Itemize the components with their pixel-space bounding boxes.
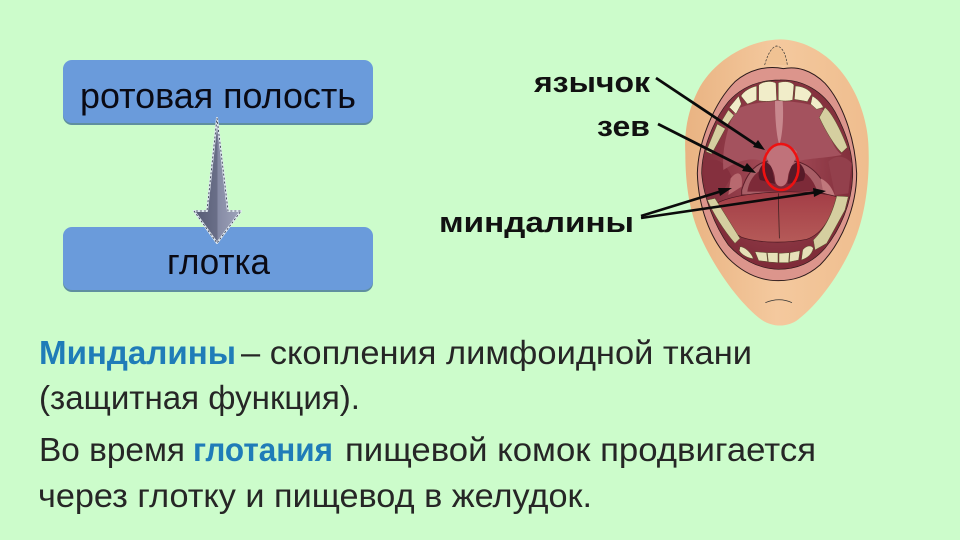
illustration: open mouth	[685, 39, 869, 325]
arrow: ротовая полость to глотка	[194, 118, 241, 243]
text block: definition of tonsils: (защитная функция).	[39, 379, 360, 416]
arrows: миндалины pointers	[641, 188, 826, 218]
lips	[697, 67, 857, 281]
upper teeth	[706, 82, 847, 154]
tonsil right	[821, 178, 835, 197]
lower teeth	[707, 196, 848, 263]
arrow: зев pointer	[658, 124, 756, 173]
label: миндалины: миндалины	[439, 207, 634, 239]
text block: swallowing: через глотку и пищевод в желудок.	[38, 477, 592, 514]
throat	[742, 161, 828, 195]
uvula	[766, 145, 797, 186]
box: ротовая полость: ротовая полость	[80, 75, 356, 116]
box: глотка: глотка	[167, 241, 271, 282]
palate	[723, 101, 842, 170]
box: глотка	[63, 227, 373, 292]
dark arches	[759, 162, 775, 184]
text block: definition of tonsils	[39, 334, 752, 416]
text block: definition of tonsils: Миндалины	[39, 334, 236, 371]
mouth cavity	[702, 80, 853, 269]
box: ротовая полость	[63, 60, 373, 125]
label: язычок: язычок	[533, 67, 651, 99]
highlight: red oval around зев	[764, 144, 798, 190]
text block: swallowing: Во время	[39, 431, 185, 468]
tonsil left	[728, 173, 742, 195]
nose outline	[765, 46, 787, 65]
text block: swallowing: глотания	[193, 431, 333, 468]
arrow: язычок pointer	[656, 78, 765, 150]
face skin	[685, 39, 869, 325]
tongue	[717, 192, 837, 242]
text block: swallowing	[38, 431, 816, 514]
label: зев: зев	[597, 111, 650, 143]
chin line	[765, 300, 792, 303]
cheek sides	[703, 160, 732, 202]
text block: definition of tonsils: – скопления лимфоидной ткани	[241, 334, 752, 371]
text block: swallowing: пищевой комок продвигается	[345, 431, 816, 468]
